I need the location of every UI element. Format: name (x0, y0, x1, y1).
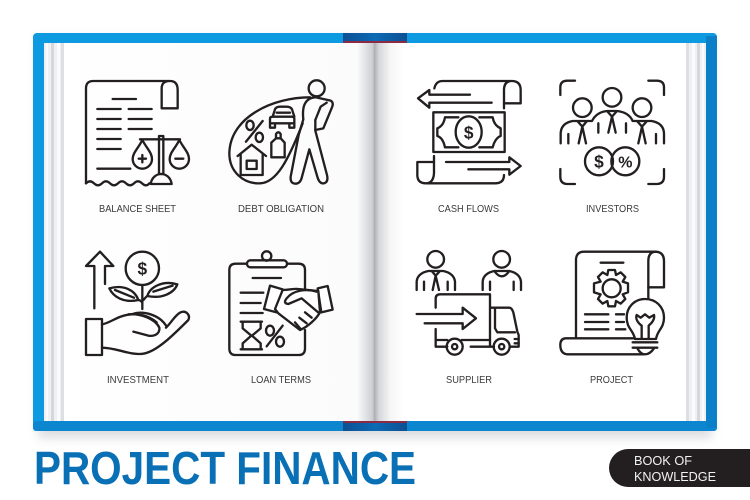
label: supplier: SUPPLIER (446, 374, 492, 386)
icon: project (560, 252, 664, 354)
icon: debt obligation (229, 80, 333, 184)
handshake (264, 286, 333, 330)
percent (246, 121, 263, 142)
badge: book of knowledge: KNOWLEDGE (634, 470, 716, 484)
spine top (343, 33, 407, 43)
label: debt obligation: DEBT OBLIGATION (238, 203, 324, 215)
label: balance sheet: BALANCE SHEET (99, 203, 177, 215)
left page (44, 43, 377, 421)
badge: book of knowledge (609, 449, 750, 487)
icon: investors: % (618, 154, 632, 171)
icon: investment: $ (138, 259, 148, 279)
title: PROJECT FINANCE (34, 442, 416, 494)
house (238, 145, 266, 175)
book cover (33, 33, 717, 431)
icon: supplier (417, 251, 521, 355)
icon: investment (86, 252, 189, 355)
icon: investors (560, 81, 664, 184)
car (270, 107, 294, 128)
label: loan terms: LOAN TERMS (251, 374, 311, 386)
badge: book of knowledge: BOOK OF (634, 454, 692, 468)
icon: loan terms (229, 251, 333, 355)
tag (271, 132, 285, 157)
label: cash flows: CASH FLOWS (438, 203, 499, 215)
label: investment: INVESTMENT (107, 374, 170, 386)
icon: cash flows (417, 81, 521, 183)
label: project: PROJECT (590, 374, 634, 386)
icon: investors: $ (594, 152, 604, 172)
icon: balance sheet (86, 81, 189, 185)
icon: cash flows: $ (464, 122, 474, 142)
spine bottom (343, 421, 407, 431)
right page (374, 43, 706, 421)
book (33, 33, 717, 438)
label: investors: INVESTORS (586, 203, 639, 215)
